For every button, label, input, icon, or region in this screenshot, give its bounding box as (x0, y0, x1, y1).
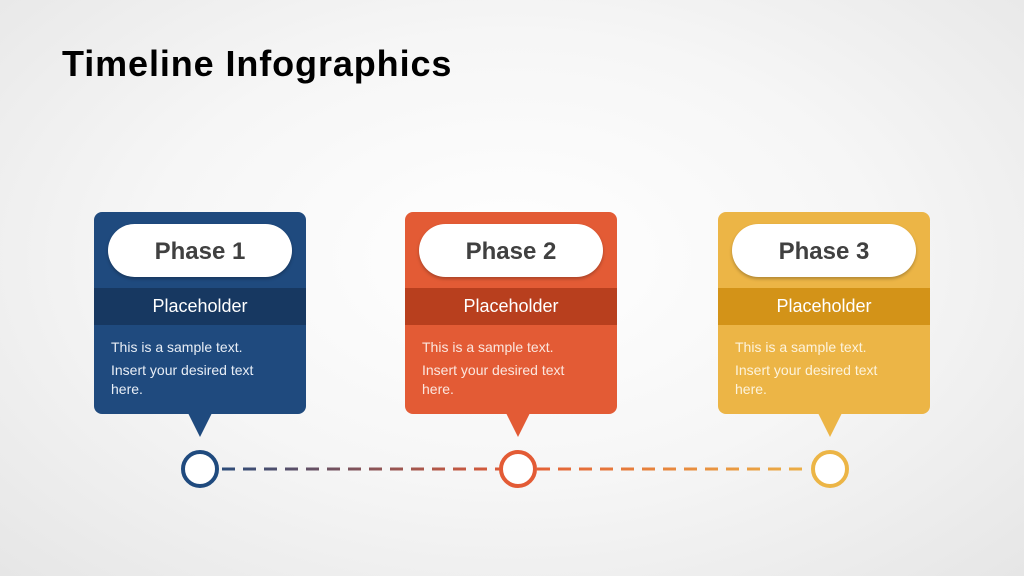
panel: phase 1 (94, 212, 306, 414)
panel: phase 3 (718, 212, 930, 414)
phase 2 pill: Phase 2 (466, 238, 556, 265)
circle 3 (813, 452, 847, 486)
phase 1 pointer (188, 413, 212, 437)
phase 2 pointer (506, 413, 530, 437)
phase 3 pill: Phase 3 (779, 238, 869, 265)
phase 1 pill: Phase 1 (155, 238, 245, 265)
title: Timeline Infographics (62, 43, 452, 84)
phase 2 text: This is a sample text. (422, 339, 554, 355)
phase 3 band (718, 288, 930, 325)
phase 1 text: Insert your desired text here. (111, 362, 253, 397)
phase 3 text: Insert your desired text here. (735, 362, 877, 397)
phase 3 band: Placeholder (776, 296, 872, 316)
phase 3 text: This is a sample text. (735, 339, 866, 355)
phase 1 pill (108, 224, 292, 277)
phase 2 pill (419, 224, 603, 277)
phase 2 band: Placeholder (463, 296, 559, 316)
phase 1 band (94, 288, 306, 325)
circle 2 (501, 452, 535, 486)
phase 2 text: Insert your desired text here. (422, 362, 564, 397)
circle 1 (183, 452, 217, 486)
phase 1 text: This is a sample text. (111, 339, 242, 355)
phase 3 pill (732, 224, 916, 277)
phase 2 band (405, 288, 617, 325)
phase 2 text (422, 339, 564, 397)
phase 1 band: Placeholder (152, 296, 248, 316)
phase 3 pointer (818, 413, 842, 437)
phase 3 text (735, 339, 878, 397)
phase 1 text (111, 339, 254, 397)
panel: phase 2 (405, 212, 617, 414)
